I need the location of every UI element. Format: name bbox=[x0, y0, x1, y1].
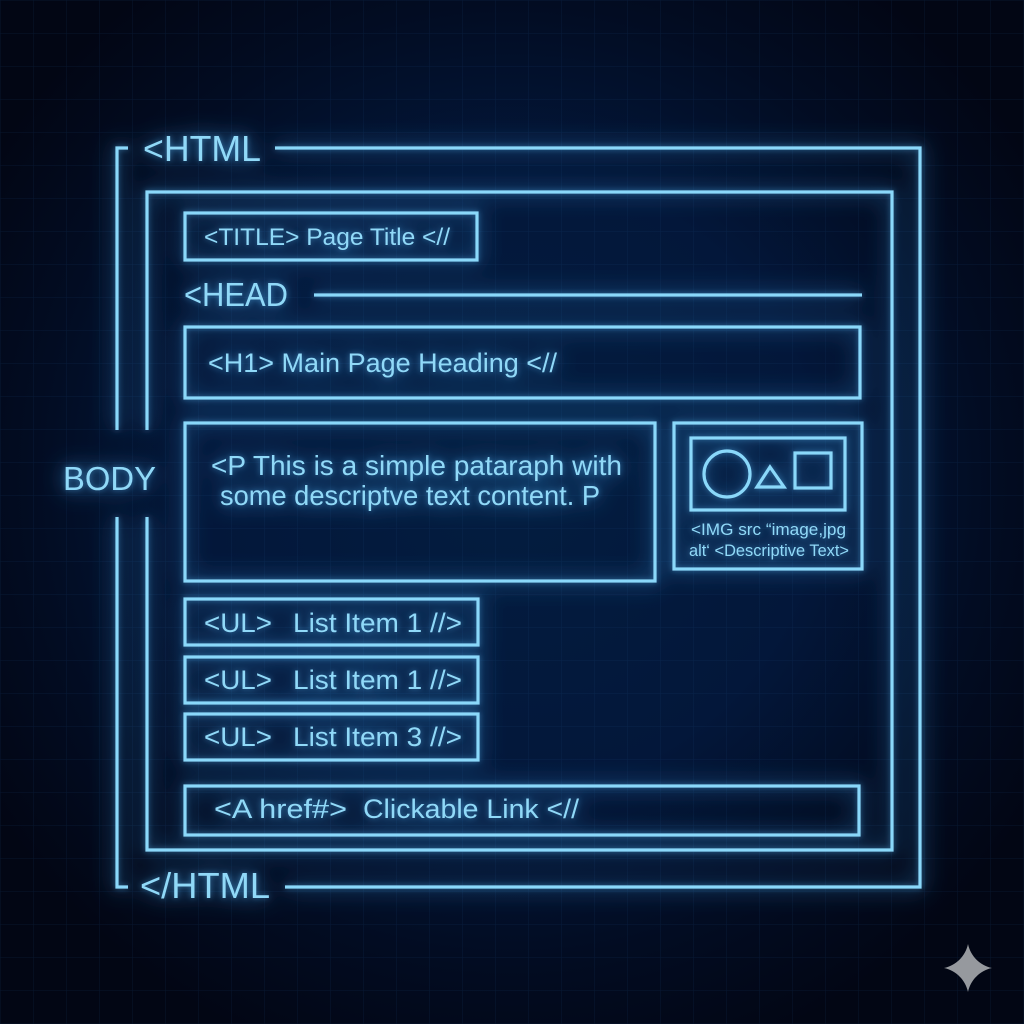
panel: title tag: <TITLE> Page Title <// bbox=[204, 224, 450, 251]
panel: paragraph tag bbox=[185, 423, 655, 581]
heading: closing HTML tag: </HTML bbox=[140, 865, 270, 906]
heading: HEAD tag with rule: <HEAD bbox=[184, 276, 288, 313]
list item 1: List Item 1 //> bbox=[293, 608, 462, 638]
list item 2 bbox=[185, 657, 478, 703]
panel: image tag bbox=[674, 423, 862, 569]
list item 2: List Item 1 //> bbox=[293, 665, 462, 695]
panel: anchor link tag: Clickable Link <// bbox=[363, 794, 580, 824]
label: BODY: BODY bbox=[63, 460, 156, 497]
icon: image placeholder with shapes bbox=[691, 438, 845, 510]
panel: anchor link tag: <A href#> bbox=[214, 794, 347, 824]
panel: image tag: alt‘ <Descriptive Text> bbox=[689, 541, 849, 560]
panel: title tag bbox=[185, 213, 477, 260]
panel: anchor link tag bbox=[185, 786, 859, 835]
list item 1: <UL> bbox=[204, 608, 272, 638]
icon: sparkle watermark bbox=[944, 944, 992, 992]
panel: outer HTML frame bbox=[117, 128, 920, 906]
panel: paragraph tag: <P This is a simple pataraph with bbox=[211, 450, 622, 481]
list item 1 bbox=[185, 599, 478, 645]
list item 3: <UL> bbox=[204, 722, 272, 752]
heading: opening HTML tag: <HTML bbox=[143, 128, 261, 169]
list item 3: List Item 3 //> bbox=[293, 722, 462, 752]
list item 3 bbox=[185, 714, 478, 760]
panel: H1 heading tag bbox=[185, 327, 860, 398]
panel: paragraph tag: some descriptve text content. P bbox=[220, 480, 600, 511]
panel: image tag: <IMG src “image,jpg bbox=[691, 520, 846, 539]
list item 2: <UL> bbox=[204, 665, 272, 695]
panel: H1 heading tag: <H1> Main Page Heading <// bbox=[208, 348, 557, 378]
